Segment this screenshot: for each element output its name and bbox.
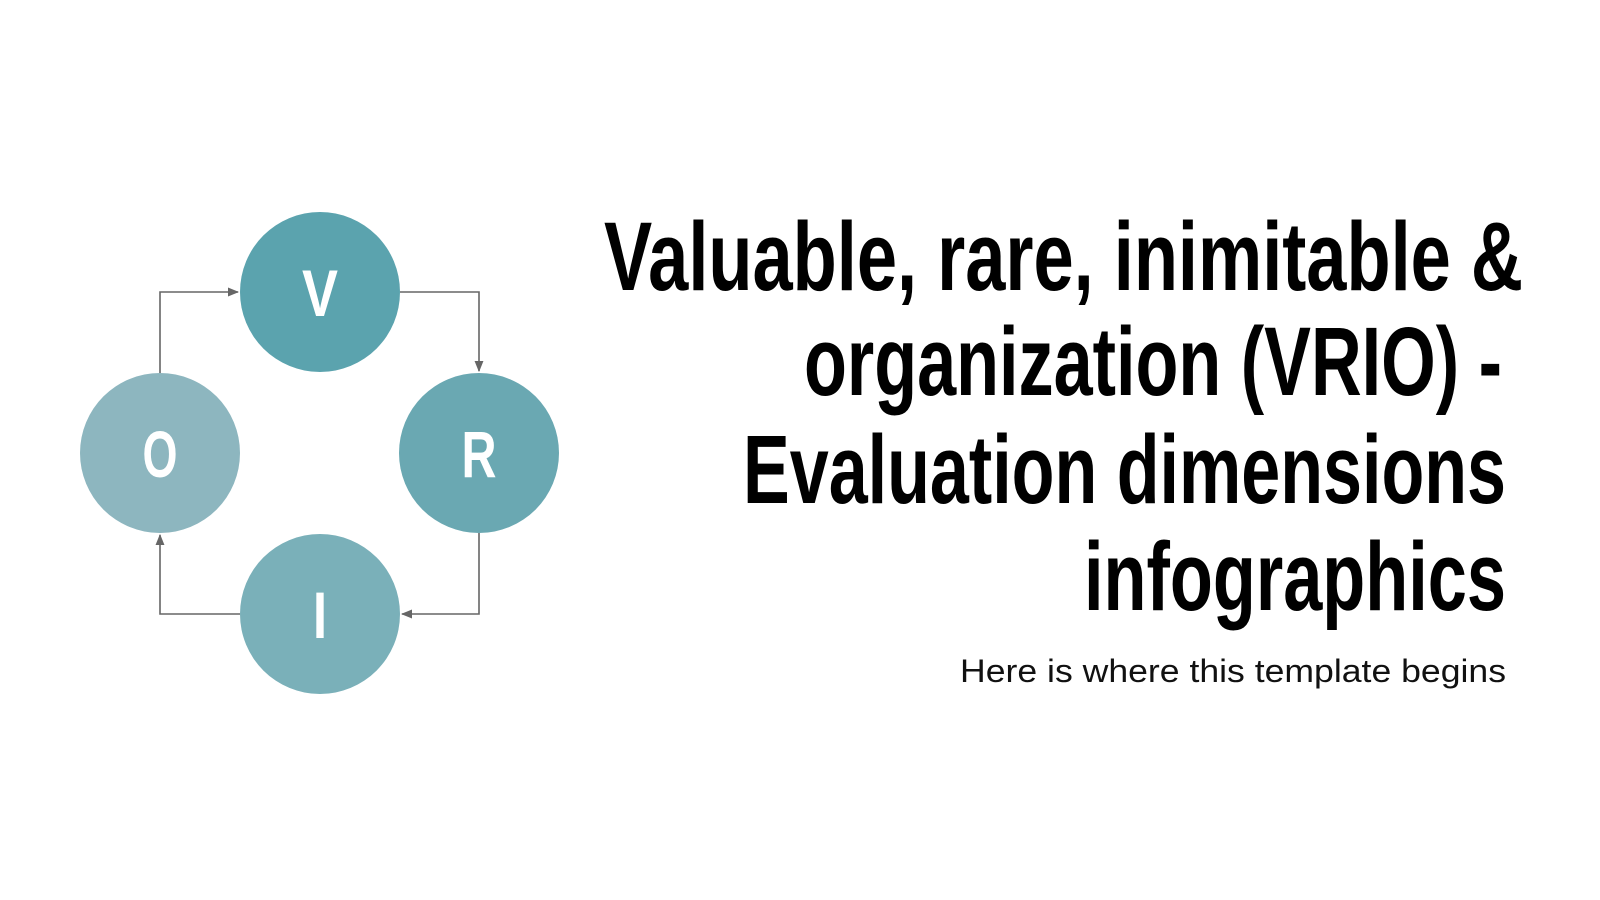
arrow: V to R (400, 292, 479, 371)
arrow: O to V (160, 292, 238, 373)
arrow: I to O (160, 535, 240, 614)
circle: V (240, 212, 400, 372)
subtitle: Here is where this template begins (960, 653, 1506, 689)
circle: V: V (302, 256, 338, 330)
circle: O (80, 373, 240, 533)
arrow: R to I (402, 533, 479, 614)
title (604, 202, 1523, 631)
circle: R (399, 373, 559, 533)
circle: O: O (142, 417, 178, 491)
circle: I (240, 534, 400, 694)
circle: R: R (462, 417, 496, 491)
circle: I: I (313, 578, 327, 652)
